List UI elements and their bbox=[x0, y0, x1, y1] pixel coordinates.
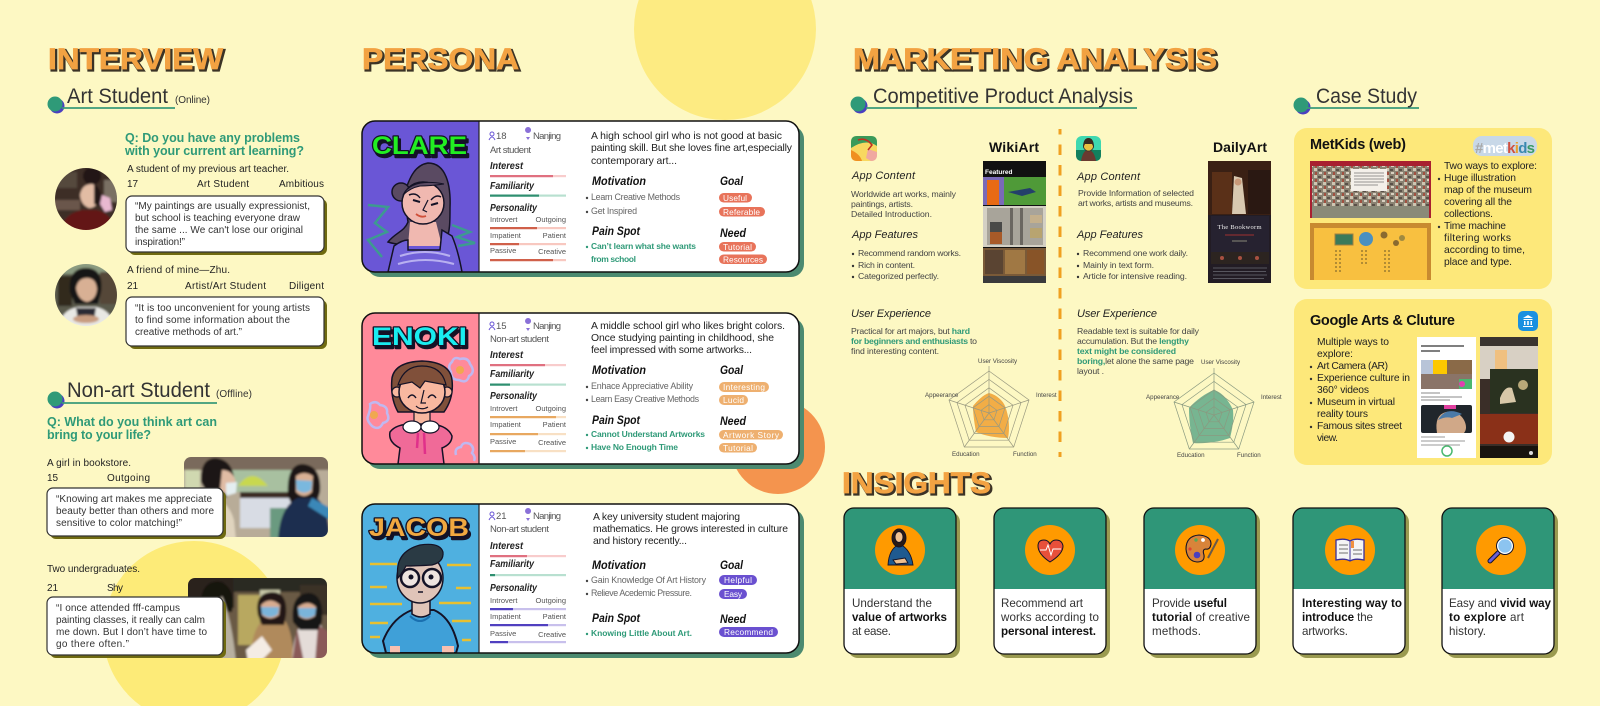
screenshot: Google art camera bbox=[1480, 337, 1538, 458]
motivation: Enoki: Motivation bbox=[592, 363, 646, 377]
product: WikiArt: Recommend random works. bbox=[858, 248, 961, 258]
need: Jacob bbox=[719, 612, 778, 637]
product: DailyArt: art works, artists and museums. bbox=[1078, 198, 1193, 208]
quote card: but school is teaching everyone draw bbox=[135, 213, 301, 224]
persona stats: Clare: Art student bbox=[490, 145, 531, 156]
goal: Enoki bbox=[719, 363, 769, 405]
product: DailyArt: text might be considered bbox=[1077, 346, 1176, 356]
interview: student of art teacher bbox=[50, 163, 327, 255]
persona name: JACOB: JACOB bbox=[371, 517, 471, 545]
insight card: artworks value: at ease. bbox=[852, 625, 891, 638]
need: Clare: Need bbox=[720, 226, 747, 240]
panel: MetKids: MetKids (web) bbox=[1310, 137, 1406, 153]
question: art student bbox=[124, 131, 304, 158]
text: Google ways to explore: Art Camera (AR) bbox=[1317, 361, 1388, 372]
product: DailyArt bbox=[1076, 136, 1271, 376]
persona stats: Enoki: Personality bbox=[490, 391, 537, 402]
motivation: Clare bbox=[586, 174, 681, 216]
photo: portrait one bbox=[55, 168, 117, 230]
persona stats: Clare: Personality bbox=[490, 203, 537, 214]
persona stats: Jacob: Personality bbox=[490, 583, 537, 594]
quote card: “My paintings are usually expressionist, bbox=[135, 201, 310, 212]
illustration: Enoki bbox=[362, 313, 479, 464]
interview: two undergraduates bbox=[47, 564, 330, 662]
quote card bbox=[47, 488, 226, 539]
illustration: Jacob bbox=[362, 504, 479, 653]
goal: Clare: Useful bbox=[723, 193, 747, 203]
persona stats: Enoki: Introvert bbox=[490, 404, 518, 413]
icon: heart pulse bbox=[1038, 540, 1063, 562]
persona name: ENOKI: ENOKI bbox=[372, 323, 467, 351]
quote card: creative methods of art.” bbox=[135, 327, 242, 338]
product: WikiArt: Practical for art majors, but hard bbox=[851, 326, 970, 336]
product: WikiArt: for beginners and enthusiasts to bbox=[851, 336, 977, 346]
persona description: Enoki: Once studying painting in childhood, she bbox=[591, 333, 774, 344]
question: art student: with your current art learning? bbox=[124, 144, 304, 158]
quote card: to find some information about the bbox=[135, 315, 290, 326]
persona description: Jacob: and history recently... bbox=[593, 536, 687, 547]
need: Enoki: Tutorial bbox=[723, 443, 753, 453]
persona description: Enoki bbox=[591, 321, 785, 356]
text: Google ways to explore: Multiple ways to bbox=[1317, 337, 1389, 348]
product: WikiArt: User Experience bbox=[851, 308, 931, 320]
quote card: “It is too unconvenient for young artists bbox=[135, 303, 310, 314]
quote card: go there often.” bbox=[56, 639, 129, 650]
panel: MetKids bbox=[1294, 128, 1552, 289]
interview: student of art teacher: Ambitious bbox=[279, 179, 324, 190]
need: Clare: Tutorial bbox=[723, 242, 752, 252]
persona stats: Clare: Patient bbox=[543, 231, 567, 240]
product: WikiArt: Rich in content. bbox=[858, 260, 915, 270]
interview: two undergraduates: 21 bbox=[47, 583, 59, 594]
insight card: interesting way bbox=[1293, 508, 1409, 658]
motivation: Jacob: Relieve Acedemic Pressure. bbox=[591, 588, 692, 598]
subheading: Art Student: Art Student bbox=[67, 85, 168, 108]
persona description: Jacob: A key university student majoring bbox=[593, 512, 740, 523]
persona description: Jacob bbox=[593, 512, 788, 547]
decorative yellow circle bottom left bbox=[103, 541, 285, 706]
persona stats: Clare bbox=[489, 127, 567, 261]
heading: INSIGHTS: INSIGHTS bbox=[844, 468, 992, 502]
motivation: Enoki bbox=[586, 363, 700, 404]
persona stats: Jacob: Outgoing bbox=[536, 596, 566, 605]
pain spot: Jacob: Pain Spot bbox=[592, 611, 641, 625]
text: Google ways to explore: explore: bbox=[1317, 349, 1353, 360]
goal: Clare: Goal bbox=[720, 174, 744, 188]
need: Enoki: Artwork Story bbox=[723, 430, 780, 440]
product: DailyArt: DailyArt bbox=[1213, 139, 1267, 155]
interview: friend Zhu: Artist/Art Student bbox=[185, 281, 266, 292]
product: WikiArt: Detailed Introduction. bbox=[851, 209, 932, 219]
motivation: Jacob: Motivation bbox=[592, 558, 646, 572]
insight card: vivid explore: history. bbox=[1449, 625, 1486, 638]
radar chart: DailyArt: User Viscosity bbox=[1201, 359, 1241, 366]
text: MetKids explore: Time machine bbox=[1444, 221, 1506, 232]
heading: INSIGHTS: INSIGHTS bbox=[842, 467, 991, 500]
product: WikiArt: App Content bbox=[851, 170, 916, 182]
insight card: interesting way: artworks. bbox=[1302, 625, 1348, 638]
interview: student of art teacher: 17 bbox=[127, 179, 139, 190]
insight card: vivid explore: to explore art bbox=[1449, 611, 1525, 624]
screenshot: museum map bbox=[1310, 161, 1431, 218]
product: WikiArt: WikiArt bbox=[989, 139, 1039, 155]
product: DailyArt: User Experience bbox=[1077, 308, 1157, 320]
persona stats: Enoki: Impatient bbox=[490, 420, 522, 429]
interview: two undergraduates: Shy bbox=[107, 583, 123, 594]
subheading: Non-art Student bbox=[48, 379, 252, 408]
motivation: Clare: Motivation bbox=[592, 174, 646, 188]
quote card: inspiration!” bbox=[135, 237, 185, 248]
text: MetKids explore: according to time, bbox=[1444, 245, 1525, 256]
icon: DailyArt app bbox=[1076, 136, 1101, 161]
interview: friend Zhu: A friend of mine—Zhu. bbox=[127, 265, 230, 276]
persona description: Clare: painting skill. But she loves fine art,especially bbox=[591, 143, 793, 154]
radar chart: DailyArt: Appeerance bbox=[1146, 394, 1180, 401]
product: WikiArt: Categorized perfectly. bbox=[858, 271, 939, 281]
icon: magnifier bbox=[1490, 538, 1514, 561]
need: Clare: Resources bbox=[723, 254, 763, 264]
panel: Google Arts & Culture: Google Arts & Cluture bbox=[1310, 313, 1455, 329]
persona stats: Jacob: Introvert bbox=[490, 596, 518, 605]
persona stats: Jacob: Nanjing bbox=[533, 511, 561, 522]
quote card: painting classes, it really can calm bbox=[56, 615, 205, 626]
screenshot: DailyArt phone bbox=[1208, 161, 1271, 283]
insight card: useful tutorial: methods. bbox=[1152, 625, 1201, 638]
heading: INTERVIEW: INTERVIEW bbox=[48, 43, 224, 76]
goal: Jacob: Easy bbox=[724, 589, 743, 599]
radar chart: DailyArt bbox=[1146, 359, 1282, 459]
persona card: Clare bbox=[362, 121, 804, 277]
pain spot: Enoki: Cannot Understand Artworks bbox=[591, 429, 705, 439]
question: non-art student: bring to your life? bbox=[47, 428, 151, 442]
interview: student of art teacher: Art Student bbox=[197, 179, 249, 190]
text: MetKids explore: filtering works bbox=[1444, 233, 1511, 244]
text: Google ways to explore: view. bbox=[1317, 433, 1338, 444]
heading: INTERVIEW: INTERVIEW bbox=[50, 44, 225, 78]
panel: Google Arts & Culture bbox=[1294, 299, 1552, 465]
subheading: Case Study bbox=[1294, 85, 1419, 114]
persona stats: Enoki: Patient bbox=[543, 420, 567, 429]
radar chart: WikiArt bbox=[925, 358, 1057, 458]
motivation: Jacob: Gain Knowledge Of Art History bbox=[591, 575, 707, 585]
persona stats: Enoki: Outgoing bbox=[536, 404, 566, 413]
motivation: Enoki: Learn Easy Creative Methods bbox=[591, 394, 700, 404]
icon: Mona Lisa bbox=[888, 529, 913, 565]
product: DailyArt: boring,let alone the same page bbox=[1077, 356, 1194, 366]
text: MetKids explore: map of the museum bbox=[1444, 185, 1532, 196]
persona stats: Clare: Introvert bbox=[490, 215, 518, 224]
screenshot: Google app list bbox=[1417, 337, 1476, 458]
insight card: artworks value: Understand the bbox=[852, 597, 932, 610]
pain spot: Jacob bbox=[586, 611, 692, 638]
radar chart: DailyArt: Education bbox=[1177, 452, 1205, 459]
product: DailyArt: accumulation. But the lengthy bbox=[1077, 336, 1189, 346]
text: MetKids explore: place and type. bbox=[1444, 257, 1512, 268]
icon: WikiArt app bbox=[851, 136, 877, 161]
pain spot: Clare bbox=[586, 224, 696, 264]
persona stats: Clare: Passive bbox=[490, 246, 516, 255]
text: Google ways to explore bbox=[1310, 337, 1410, 444]
goal: Enoki: Interesting bbox=[723, 382, 765, 392]
insight card: useful tutorial: Provide useful bbox=[1152, 597, 1227, 610]
photo: undergraduates bbox=[188, 578, 327, 658]
photo: portrait two bbox=[55, 264, 117, 326]
persona name: ENOKI: ENOKI bbox=[374, 326, 469, 354]
persona stats: Jacob: Patient bbox=[543, 612, 567, 621]
illustration: Clare bbox=[362, 121, 479, 272]
insight card: artworks value bbox=[844, 508, 960, 658]
goal: Jacob: Goal bbox=[720, 558, 744, 572]
insight card: interesting way: Interesting way to bbox=[1302, 597, 1402, 610]
heading: PERSONA: PERSONA bbox=[364, 44, 520, 78]
screenshot: WikiArt phone bbox=[983, 161, 1046, 283]
persona stats: Clare: Interest bbox=[490, 161, 524, 172]
goal: Jacob: Helpful bbox=[724, 575, 752, 585]
goal: Clare: Referable bbox=[723, 207, 760, 217]
interview: two undergraduates: Two undergraduates. bbox=[47, 564, 140, 575]
product: WikiArt bbox=[851, 136, 1046, 356]
quote card: beauty better than others and more bbox=[56, 506, 214, 517]
text: MetKids explore: collections. bbox=[1444, 209, 1493, 220]
subheading: Non-art Student: (Offline) bbox=[216, 389, 252, 400]
quote card: “Knowing art makes me appreciate bbox=[56, 494, 212, 505]
radar chart: WikiArt: Interest bbox=[1036, 392, 1057, 399]
persona stats: Jacob: Passive bbox=[490, 629, 516, 638]
motivation: Jacob bbox=[586, 558, 707, 598]
persona description: Enoki: A middle school girl who likes bright colors. bbox=[591, 321, 785, 332]
persona stats: Clare: Outgoing bbox=[536, 215, 566, 224]
screenshot: DailyArt phone: The Bookworm bbox=[1218, 224, 1262, 231]
need: Clare bbox=[719, 226, 767, 264]
persona name: CLARE: CLARE bbox=[374, 135, 469, 163]
quote card: sensitive to color matching!” bbox=[56, 518, 182, 529]
quote card bbox=[126, 297, 327, 349]
question: non-art student bbox=[47, 415, 217, 442]
quote card bbox=[126, 196, 327, 255]
persona description: Enoki: feel impressed with some artworks... bbox=[591, 345, 752, 356]
persona stats: Jacob: Familiarity bbox=[490, 559, 534, 570]
product: WikiArt: App Features bbox=[851, 229, 918, 241]
insight card: personal interest: Recommend art bbox=[1001, 597, 1084, 610]
subheading: Non-art Student: Non-art Student bbox=[67, 379, 210, 402]
pain spot: Clare: Pain Spot bbox=[592, 224, 641, 238]
persona stats: Enoki: Passive bbox=[490, 437, 516, 446]
persona card: Jacob bbox=[362, 504, 804, 658]
product: DailyArt: Provide Information of selected bbox=[1078, 188, 1194, 198]
product: DailyArt: App Features bbox=[1076, 229, 1144, 241]
subheading: Art Student bbox=[48, 85, 210, 114]
product: DailyArt: Readable text is suitable for daily bbox=[1077, 326, 1200, 336]
question: non-art student: Q: What do you think art can bbox=[47, 415, 217, 429]
quote card: me down. But I don’t have time to bbox=[56, 627, 207, 638]
persona stats: Enoki bbox=[489, 318, 567, 452]
insight card: personal interest: works according to bbox=[1000, 611, 1099, 624]
pain spot: Clare: from school bbox=[591, 254, 636, 264]
persona stats: Clare: Impatient bbox=[490, 231, 522, 240]
divider dashed bbox=[1058, 129, 1062, 457]
screenshot: WikiArt phone: Featured bbox=[985, 169, 1012, 176]
need: Enoki: Need bbox=[720, 414, 747, 428]
interview: girl in bookstore bbox=[47, 450, 330, 540]
persona stats: Enoki: Familiarity bbox=[490, 369, 534, 380]
radar chart: DailyArt: Function bbox=[1237, 452, 1261, 459]
persona stats: Jacob: 21 bbox=[496, 511, 507, 522]
decorative orange circle bbox=[731, 400, 825, 494]
insight card: vivid explore: Easy and vivid way bbox=[1449, 597, 1552, 610]
persona stats: Clare: 18 bbox=[496, 131, 507, 142]
pain spot: Jacob: Knowing Little About Art. bbox=[591, 628, 692, 638]
heading: MARKETING ANALYSIS: MARKETING ANALYSIS bbox=[853, 43, 1217, 76]
persona stats: Enoki: Creative bbox=[538, 438, 566, 447]
goal: Enoki: Lucid bbox=[723, 395, 744, 405]
interview: girl in bookstore: A girl in bookstore. bbox=[47, 458, 131, 469]
product: DailyArt: Mainly in text form. bbox=[1083, 260, 1154, 270]
interview: student of art teacher: A student of my previous art teacher. bbox=[127, 164, 289, 175]
product: DailyArt: Recommend one work daily. bbox=[1083, 248, 1188, 258]
need: Jacob: Need bbox=[720, 612, 747, 626]
text: MetKids explore bbox=[1438, 161, 1537, 268]
insight card: useful tutorial bbox=[1144, 508, 1260, 658]
question: art student: Q: Do you have any problems bbox=[125, 131, 300, 145]
persona description: Clare: contemporary art... bbox=[591, 156, 677, 167]
product: DailyArt: Article for intensive reading. bbox=[1083, 271, 1187, 281]
interview: friend Zhu: Diligent bbox=[289, 281, 324, 292]
radar chart: WikiArt: Education bbox=[952, 451, 980, 458]
persona stats: Jacob: Impatient bbox=[490, 612, 522, 621]
goal: Clare bbox=[719, 174, 765, 217]
decorative yellow circle top bbox=[634, 0, 816, 120]
persona stats: Clare: Familiarity bbox=[490, 181, 534, 192]
persona stats: Clare: Creative bbox=[538, 247, 566, 256]
icon: museum bbox=[1518, 311, 1538, 331]
insight card: personal interest bbox=[994, 508, 1110, 658]
insight card: personal interest: personal interest. bbox=[1001, 625, 1096, 638]
insight card: artworks value: value of artworks bbox=[852, 611, 947, 624]
photo: bookstore bbox=[184, 457, 328, 537]
persona stats: Enoki: Non-art student bbox=[490, 334, 549, 345]
persona stats: Enoki: Nanjing bbox=[533, 321, 561, 332]
text: Google ways to explore: Famous sites street bbox=[1317, 421, 1402, 432]
text: Google ways to explore: 360° videos bbox=[1317, 385, 1369, 396]
quote card: the same ... We can't lose our original bbox=[135, 225, 303, 236]
radar chart: WikiArt: Function bbox=[1013, 451, 1037, 458]
persona card: Enoki bbox=[362, 313, 804, 469]
persona stats: Enoki: Interest bbox=[490, 350, 524, 361]
pain spot: Clare: Can’t learn what she wants bbox=[591, 241, 696, 251]
persona stats: Jacob bbox=[489, 508, 567, 643]
interview: friend Zhu bbox=[50, 260, 327, 349]
persona description: Clare bbox=[591, 131, 793, 167]
need: Jacob: Recommend bbox=[724, 627, 773, 637]
persona name: CLARE: CLARE bbox=[372, 132, 467, 160]
text: Google ways to explore: Experience culture in bbox=[1317, 373, 1410, 384]
subheading: Case Study: Case Study bbox=[1316, 85, 1417, 108]
persona name: JACOB: JACOB bbox=[369, 514, 469, 542]
persona stats: Enoki: 15 bbox=[496, 321, 507, 332]
heading: PERSONA: PERSONA bbox=[362, 43, 519, 76]
pain spot: Enoki: Pain Spot bbox=[592, 413, 641, 427]
radar chart: WikiArt: User Viscosity bbox=[978, 358, 1018, 365]
product: WikiArt: find interesting content. bbox=[851, 346, 939, 356]
icon: palette bbox=[1186, 535, 1218, 562]
heading: MARKETING ANALYSIS: MARKETING ANALYSIS bbox=[854, 44, 1218, 78]
text: MetKids explore: Two ways to explore: bbox=[1444, 161, 1537, 172]
interview: friend Zhu: 21 bbox=[127, 281, 139, 292]
persona stats: Jacob: Interest bbox=[490, 541, 524, 552]
motivation: Enoki: Enhace Appreciative Ability bbox=[591, 381, 694, 391]
pain spot: Enoki bbox=[586, 413, 705, 452]
text: Google ways to explore: reality tours bbox=[1317, 409, 1368, 420]
persona stats: Clare: Nanjing bbox=[533, 131, 561, 142]
icon: open book bbox=[1336, 539, 1364, 561]
product: WikiArt: paintings, artists. bbox=[851, 199, 913, 209]
product: DailyArt: layout . bbox=[1077, 366, 1104, 376]
persona stats: Jacob: Non-art student bbox=[490, 524, 549, 535]
quote card: “I once attended fff-campus bbox=[56, 603, 180, 614]
screenshot: time machine bbox=[1310, 223, 1431, 280]
product: DailyArt: App Content bbox=[1076, 171, 1141, 183]
persona description: Jacob: mathematics. He grows interested in culture bbox=[593, 524, 788, 535]
persona description: Clare: A high school girl who is not good at basic bbox=[591, 131, 782, 142]
text: Google ways to explore: Museum in virtual bbox=[1317, 397, 1395, 408]
insight card: vivid explore bbox=[1442, 508, 1558, 658]
motivation: Clare: Get Inspired bbox=[591, 206, 637, 216]
logo: metkids: #metkids bbox=[1475, 140, 1535, 157]
interview: girl in bookstore: Outgoing bbox=[107, 473, 150, 484]
text: MetKids explore: Huge illustration bbox=[1444, 173, 1516, 184]
subheading: Art Student: (Online) bbox=[175, 95, 210, 106]
quote card bbox=[47, 597, 226, 658]
goal: Jacob bbox=[719, 558, 757, 599]
interview: girl in bookstore: 15 bbox=[47, 473, 59, 484]
motivation: Clare: Learn Creative Methods bbox=[591, 192, 681, 202]
radar chart: WikiArt: Appeerance bbox=[925, 392, 959, 399]
goal: Enoki: Goal bbox=[720, 363, 744, 377]
text: MetKids explore: covering all the bbox=[1444, 197, 1512, 208]
radar chart: DailyArt: Interest bbox=[1261, 394, 1282, 401]
insight card: useful tutorial: tutorial of creative bbox=[1152, 611, 1250, 624]
insight card: interesting way: introduce the bbox=[1302, 611, 1373, 624]
product: WikiArt: Worldwide art works, mainly bbox=[851, 189, 957, 199]
pain spot: Enoki: Have No Enough Time bbox=[591, 442, 678, 452]
subheading: Competitive Product Analysis: Competitive Product Analysis bbox=[873, 85, 1133, 108]
need: Enoki bbox=[719, 414, 783, 453]
persona stats: Jacob: Creative bbox=[538, 630, 566, 639]
